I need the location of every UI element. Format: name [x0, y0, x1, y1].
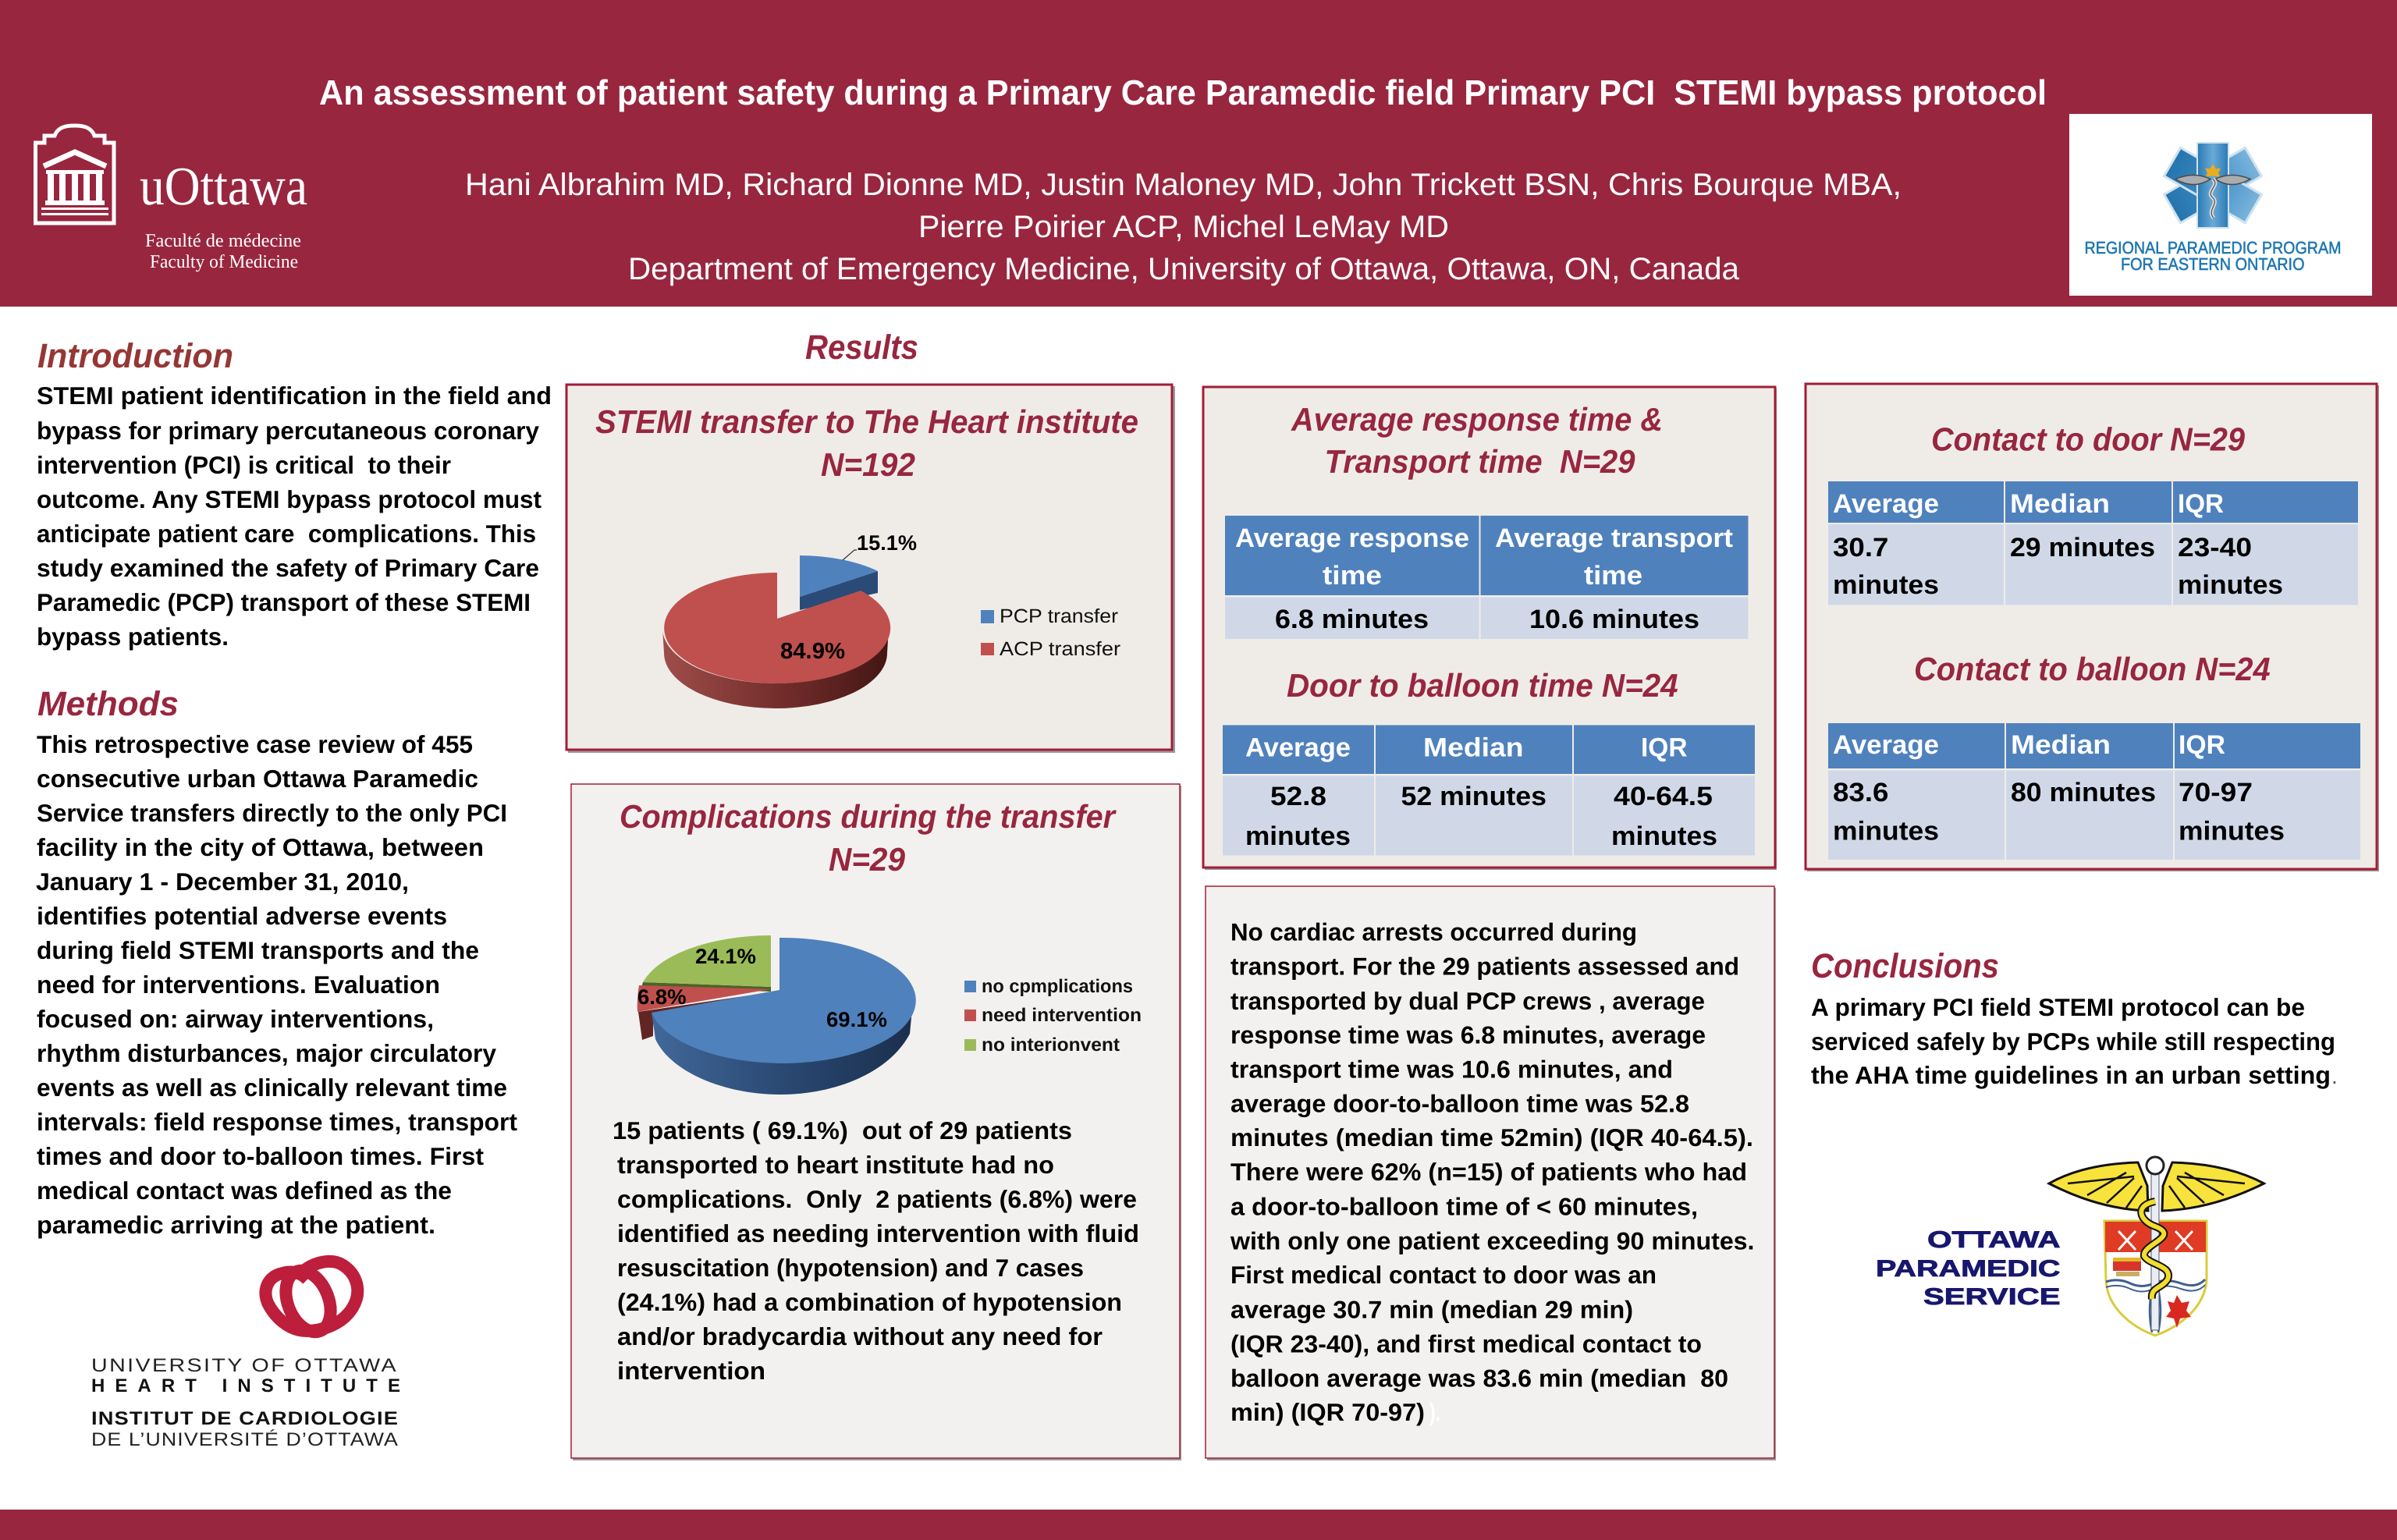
legend [981, 605, 1120, 660]
table: contact to balloon: minutes [1833, 816, 1939, 846]
text block: results narrative: No cardiac arrests occurred during [1230, 917, 1637, 946]
text block: results narrative: a door-to-balloon time of < 60 minutes, [1230, 1192, 1698, 1220]
text block: methods body: medical contact was defined as the [37, 1176, 452, 1205]
text block: results narrative: transport time was 10.6 minutes, and [1230, 1055, 1673, 1083]
panel: introduction [37, 337, 552, 651]
logo: Regional Paramedic Program: REGIONAL PARAMEDIC PROGRAM [2085, 238, 2341, 257]
text block: results narrative: First medical contact to door was an [1230, 1261, 1657, 1289]
text block: methods body: Service transfers directly to the only PCI [37, 799, 507, 827]
authors and affiliation: Hani Albrahim MD, Richard Dionne MD, Justin Maloney MD, John Trickett BSN, Chris Bourque MBA, [465, 168, 1902, 202]
text block: introduction body: bypass patients. [37, 623, 229, 651]
legend: PCP transfer [1000, 605, 1118, 627]
table: contact to balloon [1828, 723, 2360, 860]
panel: response and door to balloon [1203, 387, 1777, 870]
table: contact to door: minutes [1833, 570, 1939, 600]
heading: response and transport: Average response time & [1291, 401, 1663, 438]
text block: methods body: times and door to-balloon times. First [37, 1142, 485, 1170]
table: door to balloon: 52.8 [1270, 782, 1326, 811]
logo: University of Ottawa Heart Institute: UNIVERSITY OF OTTAWA [91, 1355, 398, 1376]
logo: Ottawa Paramedic Service [1876, 1157, 2264, 1336]
text block: complications summary: transported to heart institute had no [617, 1151, 1054, 1179]
table: contact to door: Median [2010, 489, 2110, 519]
table: contact to door: 29 minutes [2010, 533, 2155, 562]
panel: STEMI transfer [566, 385, 1175, 753]
text block: conclusions body: the AHA time guidelines in an urban setting [1811, 1061, 2331, 1089]
text block: results narrative: average door-to-balloon time was 52.8 [1230, 1089, 1689, 1117]
heading: STEMI transfer: N=192 [821, 446, 915, 483]
icon: heart knot [265, 1261, 357, 1339]
text block: conclusions body [1811, 993, 2338, 1089]
text block: methods body: identifies potential adverse events [37, 902, 447, 930]
table: contact to door: Average [1833, 489, 1939, 519]
text block: introduction body: bypass for primary percutaneous coronary [37, 417, 539, 445]
table: response and transport: Average transport [1495, 523, 1733, 553]
text block: complications summary: resuscitation (hypotension) and 7 cases [617, 1254, 1084, 1282]
text block: methods body: need for interventions. Evaluation [37, 970, 440, 999]
authors and affiliation: Pierre Poirier ACP, Michel LeMay MD [918, 210, 1449, 244]
table: response and transport: time [1584, 561, 1642, 591]
footer band [0, 1510, 2397, 1540]
table: contact to balloon: Average [1833, 730, 1939, 760]
heading: complications: N=29 [829, 841, 906, 878]
heading: complications [620, 798, 1117, 878]
pie chart: PCP vs ACP transfer: 84.9% [780, 639, 845, 664]
text block: results narrative [1230, 917, 1754, 1426]
text block: results narrative: average 30.7 min (median 29 min) [1230, 1295, 1633, 1323]
pie chart: PCP vs ACP transfer: 15.1% [857, 531, 917, 555]
table: contact to door: minutes [2178, 570, 2283, 600]
heading: STEMI transfer: STEMI transfer to The Heart institute [595, 403, 1138, 440]
text block: methods body: during field STEMI transports and the [37, 936, 479, 964]
text block: complications summary: 15 patients ( 69.1%) out of 29 patients [613, 1116, 1072, 1144]
legend: no cpmplications [982, 976, 1133, 997]
authors and affiliation [465, 168, 1902, 286]
text block: results narrative: minutes (median time 52min) (IQR 40-64.5). [1230, 1123, 1753, 1151]
panel: methods [36, 685, 518, 1239]
table: door to balloon: IQR [1641, 733, 1687, 763]
panel: conclusions [1811, 947, 2338, 1089]
pie chart: PCP vs ACP transfer [662, 531, 917, 708]
logo: uOttawa Faculty of Medicine: Faculté de médecine [145, 231, 301, 251]
table: door to balloon: 40-64.5 [1614, 782, 1713, 811]
text block: results narrative: transported by dual PCP crews , average [1230, 987, 1705, 1015]
table: contact to door [1828, 481, 2358, 605]
table: contact to door: 23-40 [2178, 533, 2252, 562]
table: contact to balloon: Median [2011, 730, 2111, 760]
text block: methods body: consecutive urban Ottawa Paramedic [37, 765, 478, 793]
table: contact to door: IQR [2178, 489, 2224, 519]
logo: Regional Paramedic Program: FOR EASTERN ONTARIO [2121, 254, 2305, 274]
text block: conclusions body: A primary PCI field STEMI protocol can be [1811, 993, 2305, 1021]
text block: complications summary: complications. Only 2 patients (6.8%) were [617, 1185, 1137, 1213]
text block: results narrative: min) (IQR 70-97) [1230, 1398, 1425, 1426]
table: contact to door: 30.7 [1833, 533, 1888, 562]
text block: introduction body: intervention (PCI) is critical to their [37, 451, 451, 479]
logo: University of Ottawa Heart Institute: INSTITUT DE CARDIOLOGIE [91, 1408, 399, 1429]
text block: results narrative: (IQR 23-40), and first medical contact to [1230, 1329, 1702, 1357]
heading: Introduction: Introduction [37, 337, 233, 375]
legend [964, 976, 1142, 1056]
legend: ACP transfer [1000, 638, 1120, 660]
table: door to balloon: Median [1423, 733, 1523, 763]
panel: contact tables [1806, 384, 2379, 871]
header band [0, 0, 2397, 307]
text block: complications summary: identified as needing intervention with fluid [617, 1219, 1139, 1247]
heading: response and transport [1291, 401, 1663, 480]
text block: complications summary: intervention [617, 1357, 765, 1385]
table: contact to balloon: IQR [2179, 730, 2225, 760]
pie chart: complications: 69.1% [826, 1008, 887, 1031]
heading: contact to balloon: Contact to balloon N=24 [1914, 651, 2271, 687]
panel: results narrative [1206, 886, 1776, 1460]
heading: Results: Results [805, 328, 918, 367]
heading: door to balloon: Door to balloon time N=24 [1287, 667, 1678, 704]
text block: methods body: events as well as clinically relevant time [37, 1073, 507, 1102]
heading: response and transport: Transport time N=29 [1325, 443, 1635, 480]
icon: crest with caduceus [2049, 1157, 2264, 1336]
table: door to balloon: minutes [1611, 821, 1717, 851]
text block: results narrative: with only one patient exceeding 90 minutes. [1230, 1226, 1754, 1254]
legend: no interionvent [982, 1034, 1120, 1056]
heading: complications: Complications during the transfer [620, 798, 1117, 835]
logo: Ottawa Paramedic Service: PARAMEDIC [1876, 1256, 2060, 1282]
logo: uOttawa Faculty of Medicine [36, 126, 307, 272]
table: response and transport: time [1323, 561, 1382, 591]
text block: methods body: rhythm disturbances, major circulatory [37, 1039, 496, 1067]
text block: results narrative: ). [1429, 1398, 1440, 1426]
logo: Ottawa Paramedic Service: OTTAWA [1927, 1227, 2060, 1253]
text block: methods body: This retrospective case review of 455 [37, 730, 473, 758]
pie chart: complications: 24.1% [695, 945, 756, 968]
text block: results narrative: transport. For the 29 patients assessed and [1230, 952, 1739, 980]
heading: STEMI transfer [595, 403, 1138, 483]
logo: Ottawa Paramedic Service: SERVICE [1923, 1284, 2060, 1310]
heading: conclusions: Conclusions [1811, 947, 1999, 985]
text block: complications summary: (24.1%) had a combination of hypotension [617, 1288, 1122, 1316]
table: response and transport: 10.6 minutes [1529, 605, 1699, 634]
table: response and transport: Average response [1235, 523, 1469, 553]
table: door to balloon: minutes [1245, 821, 1351, 851]
text block: results narrative: balloon average was 83.6 min (median 80 [1230, 1364, 1728, 1392]
logo: uOttawa Faculty of Medicine: uOttawa [140, 157, 307, 217]
heading: Methods: Methods [37, 685, 179, 723]
logo: Regional Paramedic Program [2069, 114, 2372, 296]
table: door to balloon: 52 minutes [1401, 782, 1547, 811]
logo: University of Ottawa Heart Institute: HEART INSTITUTE [91, 1375, 400, 1396]
text block: complications summary [613, 1116, 1139, 1385]
text block: methods body: facility in the city of Ottawa, between [37, 833, 484, 861]
text block: introduction body [37, 381, 552, 651]
pie chart: complications: 6.8% [637, 985, 687, 1009]
legend: need intervention [982, 1005, 1142, 1026]
text block: methods body: focused on: airway interventions, [37, 1005, 434, 1033]
text block: introduction body: anticipate patient care complications. This [37, 520, 536, 548]
text block: conclusions body: serviced safely by PCPs while still respecting [1811, 1027, 2335, 1056]
text block: introduction body: Paramedic (PCP) transport of these STEMI [37, 588, 531, 616]
table: door to balloon [1223, 726, 1755, 855]
table: contact to balloon: minutes [2179, 816, 2285, 846]
table: response and transport [1225, 516, 1748, 639]
icon: star of life [2164, 143, 2261, 228]
table: response and transport: 6.8 minutes [1275, 605, 1429, 634]
text block: complications summary: and/or bradycardia without any need for [617, 1322, 1103, 1350]
text block: results narrative: There were 62% (n=15) of patients who had [1230, 1158, 1747, 1186]
pie chart: complications [637, 935, 916, 1095]
text block: introduction body: outcome. Any STEMI bypass protocol must [37, 485, 542, 513]
authors and affiliation: Department of Emergency Medicine, University of Ottawa, Ottawa, ON, Canada [628, 252, 1740, 286]
title: An assessment of patient safety during a Primary Care Paramedic field Primary PCI STEMI bypass protocol [319, 73, 2047, 112]
logo: University of Ottawa Heart Institute [91, 1261, 400, 1450]
text block: introduction body: study examined the safety of Primary Care [37, 554, 539, 582]
text block: methods body: January 1 - December 31, 2010, [36, 868, 409, 896]
text block: methods body [36, 730, 518, 1239]
text block: results narrative: response time was 6.8 minutes, average [1230, 1020, 1706, 1049]
table: contact to balloon: 80 minutes [2011, 778, 2156, 807]
text block: methods body: intervals: field response times, transport [37, 1108, 518, 1136]
text block: methods body: paramedic arriving at the patient. [37, 1211, 435, 1239]
panel: complications [571, 784, 1181, 1460]
table: contact to balloon: 83.6 [1833, 778, 1888, 807]
heading: contact to door: Contact to door N=29 [1931, 421, 2246, 457]
table: contact to balloon: 70-97 [2179, 778, 2253, 807]
logo: uOttawa Faculty of Medicine: Faculty of Medicine [150, 252, 298, 272]
logo: University of Ottawa Heart Institute: DE L’UNIVERSITÉ D’OTTAWA [91, 1429, 399, 1450]
table: door to balloon: Average [1245, 733, 1351, 763]
text block: conclusions body: . [2331, 1064, 2338, 1088]
text block: introduction body: STEMI patient identification in the field and [37, 381, 552, 410]
